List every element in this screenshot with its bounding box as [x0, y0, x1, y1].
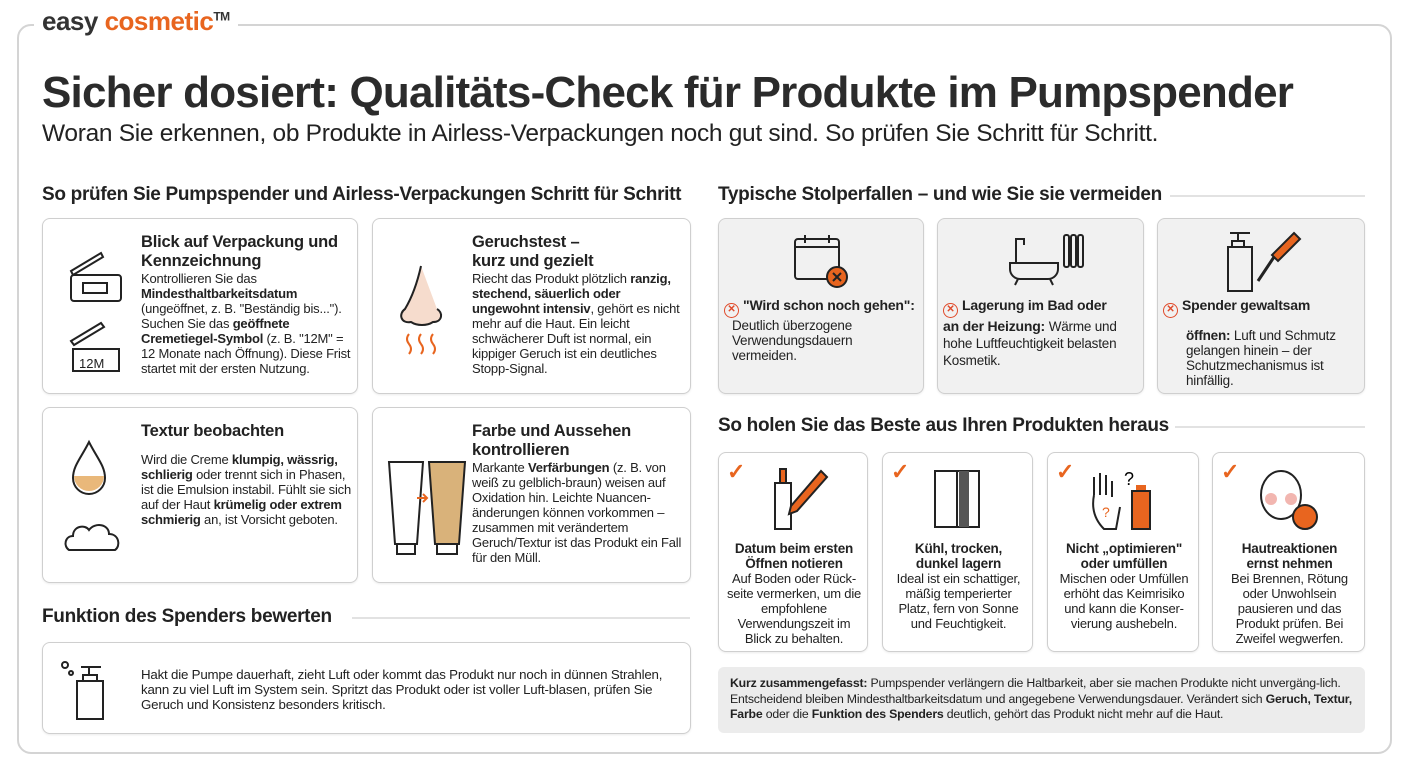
card: Lagerung im Bad: [937, 218, 1144, 394]
card: Geruchstest: [372, 218, 691, 394]
card: Hautreaktionen: ernst nehmen: [1246, 556, 1333, 571]
card: Datum: [718, 452, 868, 652]
card: Textur: [42, 407, 358, 583]
card: Hautreaktionen: Hautreaktionen: [1242, 541, 1337, 556]
heading: Beste: So holen Sie das Beste aus Ihren Produkten heraus: [718, 415, 1169, 436]
card: Wird schon noch gehen: [718, 218, 924, 394]
card: Geruchstest: kurz und gezielt: [472, 252, 593, 270]
icon: face: [1260, 470, 1318, 530]
card: Wird schon noch gehen: Deutlich überzogene Verwendungsdauern vermeiden.: [732, 318, 852, 363]
icon: drop and cream: [64, 440, 120, 551]
card: Farbe: [372, 407, 691, 583]
icon: bottle & screwdriver: [1227, 232, 1302, 292]
card: Spender gewaltsam: ✕: [1166, 304, 1175, 315]
card: Funktion: [42, 642, 691, 734]
card: Nicht optimieren: [1047, 452, 1199, 652]
card: Kühl: [882, 452, 1033, 652]
card: Hautreaktionen: ✓: [1221, 459, 1239, 484]
summary box: Kurz zusammengefasst: Pumpspender verlängern die Haltbarkeit, aber sie machen Produkte nicht unvergäng-lich. Entscheidend bleiben Mindesthaltbarkeitsdatum und angegebene Verwendungsdauer. Verändert sich Geruch, Textur, Farbe oder die Funktion des Spenders deutlich, gehört das Produkt nicht mehr auf die Haut.: [730, 676, 1352, 721]
card: Farbe: Farbe und Aussehen kontrollieren: [472, 422, 631, 459]
title: Sicher dosiert: Qualitäts-Check für Produkte im Pumpspender: [42, 68, 1293, 117]
card: Kühl: Kühl, trocken, dunkel lagern: [915, 541, 1002, 571]
heading: left steps: So prüfen Sie Pumpspender und Airless-Verpackungen Schritt für Schritt: [42, 184, 681, 205]
icon: bathtub & radiator: [1009, 234, 1084, 286]
card: Kühl: Ideal ist ein schattiger, mäßig temperierter Platz, fern von Sonne und Feuchtigkeit.: [897, 571, 1020, 631]
card: Spender gewaltsam: [1157, 218, 1365, 394]
icon: hand & bottle: ?: [1124, 469, 1134, 489]
card: Nicht optimieren: ✓: [1056, 459, 1074, 484]
card: Verpackung: [42, 218, 358, 394]
card: Geruchstest: Geruchstest –: [472, 233, 579, 251]
card: Wird schon noch gehen: ✕: [727, 304, 736, 315]
card: Farbe: Markante Verfärbungen (z. B. von weiß zu gelblich-braun) weisen auf Oxidation hin. Leichte Nuancen-änderungen können vorkommen – zusammen mit verändertem Geruch/Textur ist das Produkt ein Fall für den Müll.: [472, 460, 681, 565]
card: Hautreaktionen: Bei Brennen, Rötung oder Unwohlsein pausieren und das Produkt prüfen. Bei Zweifel wegwerfen.: [1231, 571, 1348, 646]
card: Datum: ✓: [727, 459, 745, 484]
card: Kühl: ✓: [891, 459, 909, 484]
logo: easy cosmeticTM: [42, 6, 230, 36]
icon: nose: [400, 266, 442, 355]
icon: cabinet: [934, 470, 980, 528]
heading: Stolperfallen: Typische Stolperfallen – und wie Sie sie vermeiden: [718, 184, 1162, 205]
summary box: [718, 667, 1365, 733]
card: Hautreaktionen: [1212, 452, 1365, 652]
icon: bottle & pen: [774, 468, 828, 530]
icon: tubes: [388, 461, 466, 555]
icon: hand & bottle: ?: [1102, 504, 1110, 520]
card: Nicht optimieren: Mischen oder Umfüllen erhöht das Keimrisiko und kann die Konser-vierung aushebeln.: [1060, 571, 1188, 631]
card: Wird schon noch gehen: "Wird schon noch gehen":: [743, 297, 915, 313]
card: Geruchstest: Riecht das Produkt plötzlich ranzig, stechend, säuerlich oder ungewohnt intensiv, gehört es nicht mehr auf die Haut. Ein leicht schwächerer Duft ist normal, ein kippiger Geruch ist ein deutliches Stopp-Signal.: [472, 271, 680, 376]
card: Nicht optimieren: Nicht „optimieren" oder umfüllen: [1066, 541, 1182, 571]
card: Spender gewaltsam: Spender gewaltsam: [1182, 297, 1310, 313]
icon: jars: [70, 252, 122, 372]
card: Textur: Textur beobachten: [141, 422, 284, 440]
icon: hand & bottle: [1092, 469, 1151, 530]
subtitle: Woran Sie erkennen, ob Produkte in Airless-Verpackungen noch gut sind. So prüfen Sie Schritt für Schritt.: [42, 120, 1158, 147]
card: Spender gewaltsam: öffnen: Luft und Schmutz gelangen hinein – der Schutzmechanismus ist hinfällig.: [1186, 328, 1336, 388]
card: Datum: Datum beim ersten Öffnen notieren: [735, 541, 853, 571]
icon: pump bottle: [61, 661, 104, 720]
card: Lagerung im Bad: ✕: [946, 304, 955, 315]
card: Funktion: Hakt die Pumpe dauerhaft, zieht Luft oder kommt das Produkt nur noch in dünnen Strahlen, kann zu viel Luft im System sein. Spritzt das Produkt oder ist voller Luft-blasen, prüfen Sie Geruch und Konsistenz besonders kritisch.: [141, 667, 662, 712]
card: Lagerung im Bad: Lagerung im Bad oder an der Heizung: Wärme und hohe Luftfeuchtigkeit belasten Kosmetik.: [943, 297, 1117, 368]
card: Datum: Auf Boden oder Rück-seite vermerken, um die empfohlene Verwendungszeit im Blick zu behalten.: [727, 571, 861, 646]
icon: jars: 12M: [79, 356, 104, 371]
icon: calendar: [794, 235, 848, 288]
card: Verpackung: Blick auf Verpackung und Kennzeichnung: [141, 233, 338, 270]
card: Verpackung: Kontrollieren Sie das Mindesthaltbarkeitsdatum (ungeöffnet, z. B. "Beständig bis..."). Suchen Sie das geöffnete Cremetiegel-Symbol (z. B. "12M" = 12 Monate nach Öffnung). Diese Frist startet mit der ersten Nutzung.: [141, 271, 350, 376]
heading: Funktion: Funktion des Spenders bewerten: [42, 606, 332, 627]
card: Textur: Wird die Creme klumpig, wässrig, schlierig oder trennt sich in Phasen, ist die Emulsion instabil. Fühlt sie sich auf der Haut krümelig oder extrem schmierig an, ist Vorsicht geboten.: [141, 452, 351, 527]
